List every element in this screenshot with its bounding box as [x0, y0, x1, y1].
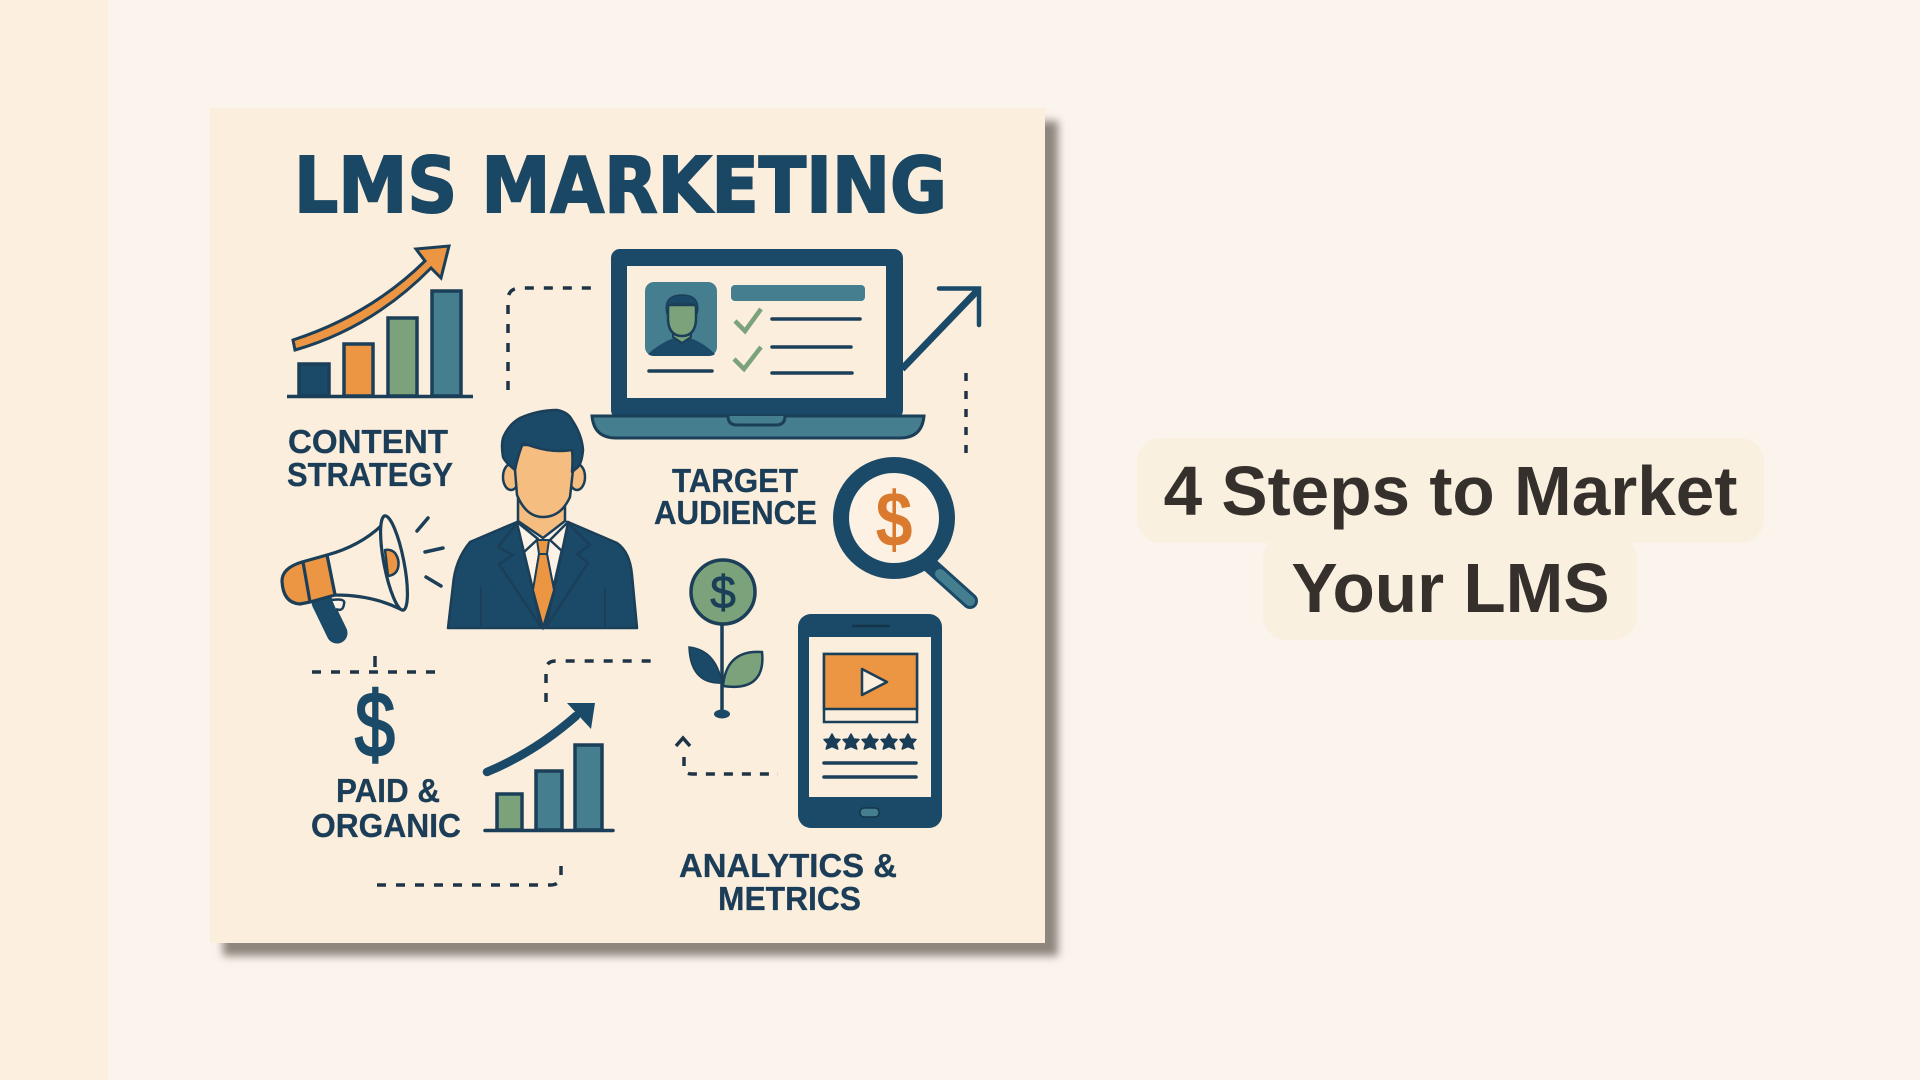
icon: money plant: [689, 560, 762, 718]
label: metrics: METRICS: [718, 880, 861, 917]
icon: money plant: $: [710, 566, 736, 618]
label: paid: PAID &: [336, 772, 440, 809]
label: analytics: ANALYTICS &: [679, 847, 897, 884]
label: target: TARGET: [672, 462, 798, 499]
face: [515, 445, 573, 517]
hair: [502, 410, 583, 472]
bar chart: content strategy: [287, 291, 473, 396]
text lines: [649, 319, 860, 373]
bar chart: paid and organic: [485, 745, 613, 830]
check marks: [734, 309, 761, 369]
dashed connector: bottom: [377, 857, 561, 885]
icon: magnifying glass with dollar: $: [876, 476, 912, 563]
shirt: [518, 522, 567, 627]
suit: [448, 522, 637, 628]
title: LMS MARKETING: [294, 142, 947, 231]
heading: highlight pill: [1137, 438, 1764, 640]
video player: [824, 654, 917, 722]
heading line 1: 4 Steps to Market: [1164, 452, 1737, 530]
arrow: navy growth arrow: [487, 703, 595, 772]
icon: megaphone: [282, 514, 443, 633]
review lines: [824, 763, 916, 777]
dashed connector: above dollar: [312, 656, 440, 672]
lapels: [498, 523, 590, 627]
dashed arrow: from tablet: [676, 738, 778, 774]
label: content strategy: CONTENT: [288, 423, 448, 460]
dashed connector: right: [964, 373, 968, 462]
icon: tablet: [798, 614, 942, 828]
neck: [518, 495, 565, 538]
ears: [503, 464, 519, 490]
panel: infographic card: [210, 108, 1045, 943]
label: strategy line: STRATEGY: [287, 456, 453, 493]
label: audience: AUDIENCE: [654, 494, 817, 531]
label: organic: ORGANIC: [311, 807, 461, 844]
header bar: [731, 285, 865, 301]
profile tile: [645, 282, 717, 356]
left accent band: [0, 0, 108, 1080]
arrow: orange growth arrow: [293, 246, 449, 350]
icon: laptop: [592, 249, 924, 438]
tie lower: [533, 554, 554, 627]
icon: dollar sign: $: [355, 673, 395, 776]
collar: [515, 522, 571, 553]
rating stars: [824, 734, 916, 749]
heading line 2: Your LMS: [1291, 549, 1610, 627]
arrow: laptop trend: [902, 288, 979, 369]
icon: businessman: [448, 410, 637, 628]
dashed connector: top left: [508, 288, 593, 390]
dashed connector: center: [546, 661, 651, 702]
icon: magnifying glass with dollar: [841, 465, 970, 601]
tie: [533, 540, 554, 627]
